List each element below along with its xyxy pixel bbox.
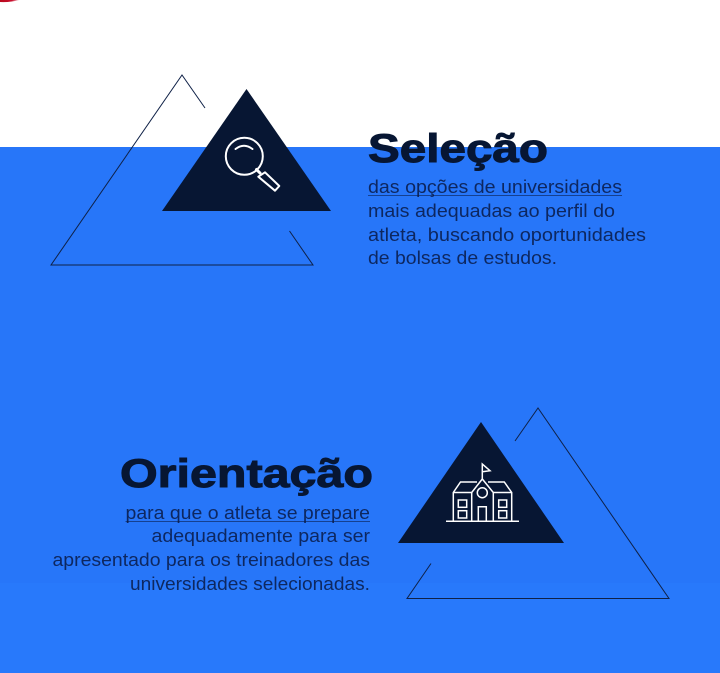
text block: Orientação description: para que o atleta se prepare <box>126 503 370 523</box>
text block: Orientação description: adequadamente para ser <box>152 526 370 546</box>
solid triangle: Seleção <box>162 89 331 211</box>
outline triangle: Orientação <box>407 408 669 598</box>
text block: Seleção description: de bolsas de estudos. <box>368 248 557 268</box>
text block: Orientação description <box>52 503 370 594</box>
text block: Seleção description <box>368 177 646 268</box>
icon: school building <box>446 464 519 521</box>
icon: magnifying glass <box>226 138 279 191</box>
heading: Orientação: Orientação <box>120 452 373 496</box>
text block: Seleção description: das opções de universidades <box>368 177 622 197</box>
heading: Seleção: Seleção <box>368 127 548 171</box>
text block: Orientação description: apresentado para os treinadores das <box>52 550 370 570</box>
solid triangle: Orientação <box>398 422 564 543</box>
outline triangle: Seleção <box>51 75 313 265</box>
text block: Seleção description: mais adequadas ao perfil do <box>368 201 615 221</box>
text block: Orientação description: universidades selecionadas. <box>130 574 370 594</box>
red accent at top-left corner <box>0 0 20 2</box>
panel: Orientação <box>52 408 669 598</box>
panel: Seleção <box>51 75 646 268</box>
text block: Seleção description: atleta, buscando oportunidades <box>368 225 646 245</box>
